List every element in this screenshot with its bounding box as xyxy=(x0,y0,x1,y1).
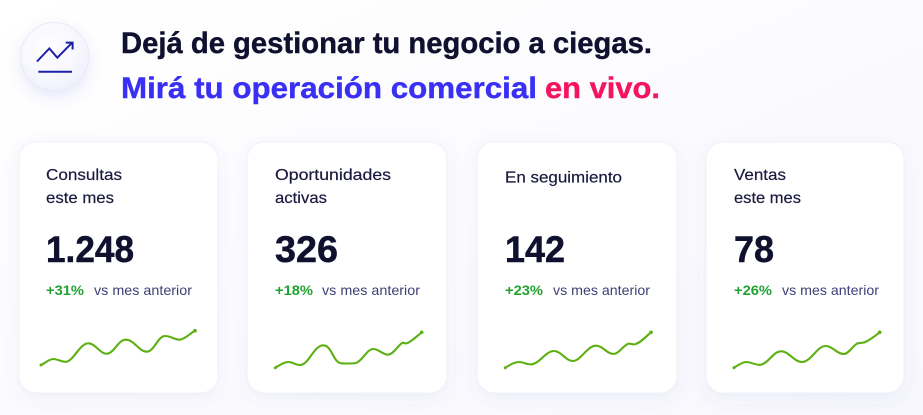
panel: en seguimiento xyxy=(477,142,677,393)
panel: consultas este mes xyxy=(19,142,218,393)
label: este mes xyxy=(46,190,114,207)
sparkline xyxy=(274,330,424,369)
label: Oportunidades xyxy=(275,167,391,184)
change: +26% xyxy=(734,282,773,298)
label: Ventas xyxy=(734,167,786,184)
change: +18% xyxy=(275,282,314,298)
change xyxy=(505,282,650,298)
value: 1.248 xyxy=(46,229,134,270)
panel: ventas este mes xyxy=(706,142,904,393)
label: En seguimiento xyxy=(505,170,622,186)
change: vs mes anterior xyxy=(94,282,192,298)
label xyxy=(275,167,391,207)
label: activas xyxy=(275,190,327,207)
label: este mes xyxy=(734,190,801,207)
sparkline xyxy=(504,330,653,369)
sparkline xyxy=(40,329,197,366)
change xyxy=(275,282,420,298)
sparkline xyxy=(732,330,882,369)
title: Dejá de gestionar tu negocio a ciegas. xyxy=(121,27,652,60)
label xyxy=(734,167,801,207)
change: vs mes anterior xyxy=(553,282,650,298)
title: Mirá tu operación comercial xyxy=(121,72,537,105)
title xyxy=(121,27,660,105)
title: en vivo. xyxy=(545,72,660,105)
change xyxy=(734,282,879,298)
value: 326 xyxy=(275,229,338,270)
value: 78 xyxy=(734,229,774,270)
label: Consultas xyxy=(46,167,122,184)
change xyxy=(46,282,192,298)
change: +31% xyxy=(46,282,85,298)
panel: oportunidades activas xyxy=(247,142,447,393)
change: vs mes anterior xyxy=(782,282,879,298)
change: vs mes anterior xyxy=(322,282,420,298)
value: 142 xyxy=(505,229,565,270)
change: +23% xyxy=(505,282,544,298)
icon: rising chart badge xyxy=(21,22,89,90)
label xyxy=(46,167,122,207)
